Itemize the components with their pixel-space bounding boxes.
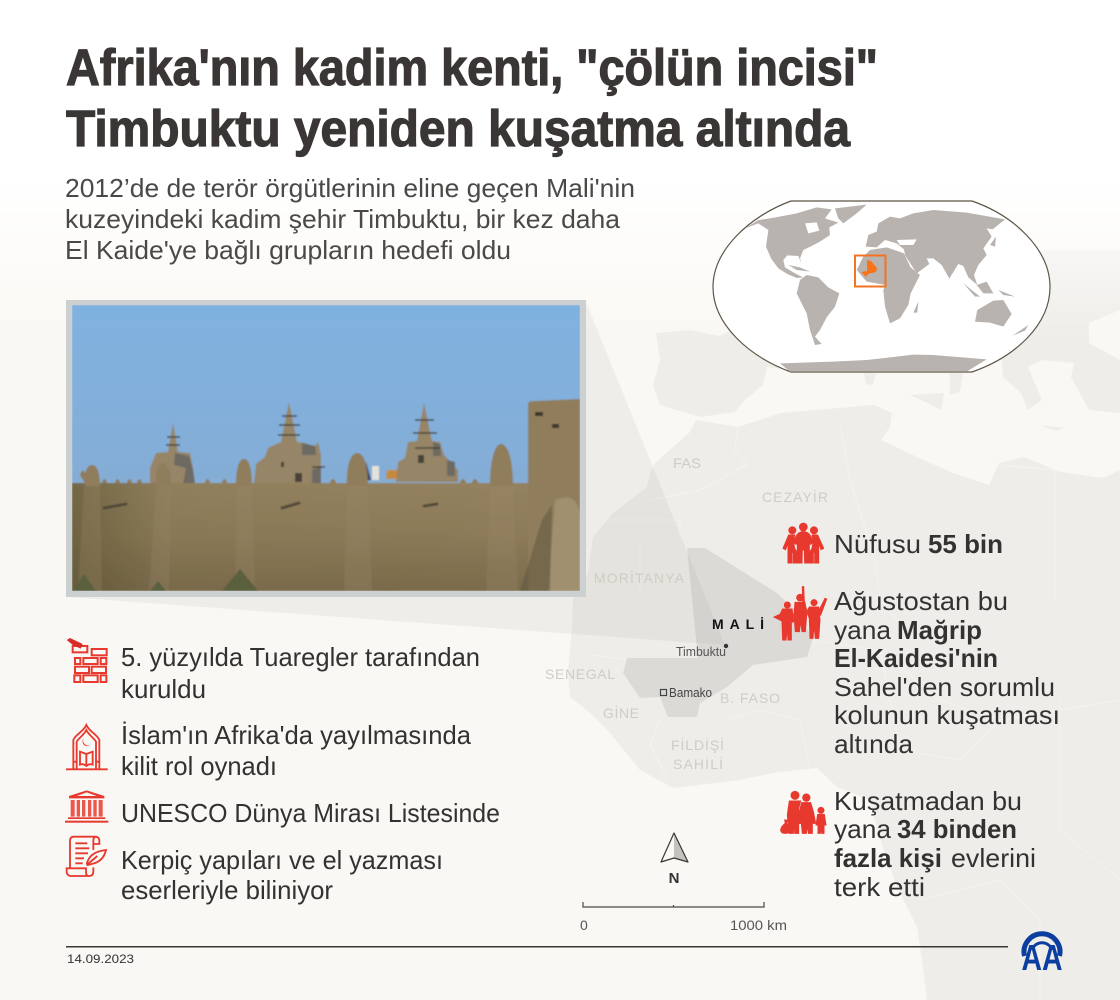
text: founding: 5. yüzyılda Tuaregler tarafından: [121, 642, 480, 672]
title: [66, 39, 878, 157]
facts column: [774, 523, 1060, 902]
country labels: B. FASO: [720, 690, 780, 706]
text: siege: Ağustostan bu: [834, 586, 1008, 616]
north arrow: N: [669, 870, 679, 887]
text: displaced: yana: [834, 814, 892, 844]
country labels: [545, 455, 828, 772]
subtitle: kuzeyindeki kadim şehir Timbuktu, bir kez daha: [65, 204, 621, 234]
title: Afrika'nın kadim kenti, "çölün incisi": [66, 39, 878, 96]
text: adobe and manuscripts: Kerpiç yapıları ve el yazması: [121, 845, 443, 875]
photo: Djinguereber mosque: [66, 300, 586, 597]
scale bar: [580, 902, 787, 933]
footer rule: [66, 946, 1008, 948]
text: displaced: Kuşatmadan bu: [834, 786, 1022, 816]
marker: Bamako: Bamako: [669, 686, 712, 700]
icon: scroll and quill: [67, 837, 106, 876]
icon: bricks: [67, 638, 107, 682]
subtitle: [65, 173, 635, 265]
country labels: GİNE: [603, 704, 639, 721]
label: Mali: MALİ: [712, 616, 764, 632]
text: adobe and manuscripts: eserleriyle biliniyor: [121, 875, 333, 905]
text: population: Nüfusu: [834, 529, 921, 559]
icon: UNESCO temple: [65, 790, 108, 823]
text: siege: altında: [834, 729, 914, 759]
country labels: MORİTANYA: [594, 569, 685, 586]
text: Islam: kilit rol oynadı: [121, 751, 277, 781]
text: displaced: fazla kişi: [834, 843, 942, 873]
text: displaced: terk etti: [834, 872, 925, 902]
text: Islam: İslam'ın Afrika'da yayılmasında: [121, 720, 472, 750]
text: adobe and manuscripts: [121, 845, 443, 905]
text: founding: [121, 642, 480, 704]
text: founding: kuruldu: [121, 674, 206, 704]
text: siege: kolunun kuşatması: [834, 700, 1060, 730]
north arrow: [661, 833, 688, 887]
country labels: SAHİLİ: [673, 755, 723, 772]
marker: Timbuktu: Timbuktu: [676, 645, 726, 659]
text: siege: Mağrip: [897, 615, 982, 645]
text: siege: [834, 586, 1060, 759]
text: displaced: [834, 786, 1036, 902]
scale bar: 1000 km: [730, 917, 787, 933]
text: population: 55 bin: [928, 529, 1003, 559]
icon: mosque book: [66, 725, 108, 769]
connector from photo to Timbuktu: [66, 302, 725, 645]
subtitle: El Kaide'ye bağlı grupların hedefi oldu: [65, 235, 511, 265]
text: UNESCO: UNESCO Dünya Mirası Listesinde: [121, 798, 500, 828]
country labels: FİLDİŞİ: [671, 736, 724, 753]
icon: displaced family: [781, 791, 826, 833]
AA logo: AA: [1022, 937, 1062, 978]
text: displaced: 34 binden: [897, 814, 1017, 844]
icon: population: [783, 523, 824, 563]
country labels: SENEGAL: [545, 666, 615, 682]
scale bar: 0: [580, 917, 588, 933]
country labels: FAS: [673, 455, 701, 471]
text: siege: El-Kaidesi'nin: [834, 643, 998, 673]
country labels: CEZAYİR: [762, 488, 828, 505]
text: population: [834, 529, 1003, 559]
title: Timbuktu yeniden kuşatma altında: [66, 100, 851, 157]
text: siege: yana: [834, 615, 892, 645]
text: siege: Sahel'den sorumlu: [834, 672, 1055, 702]
locator world map: [713, 201, 1050, 372]
Mali shape on map: [623, 548, 813, 717]
icon: armed fighters: [774, 587, 827, 640]
feature list: [65, 638, 500, 905]
date: 14.09.2023: [67, 952, 134, 966]
text: displaced: evlerini: [951, 843, 1036, 873]
subtitle: 2012’de de terör örgütlerinin eline geçen Mali'nin: [65, 173, 635, 203]
text: Islam: [121, 720, 472, 781]
